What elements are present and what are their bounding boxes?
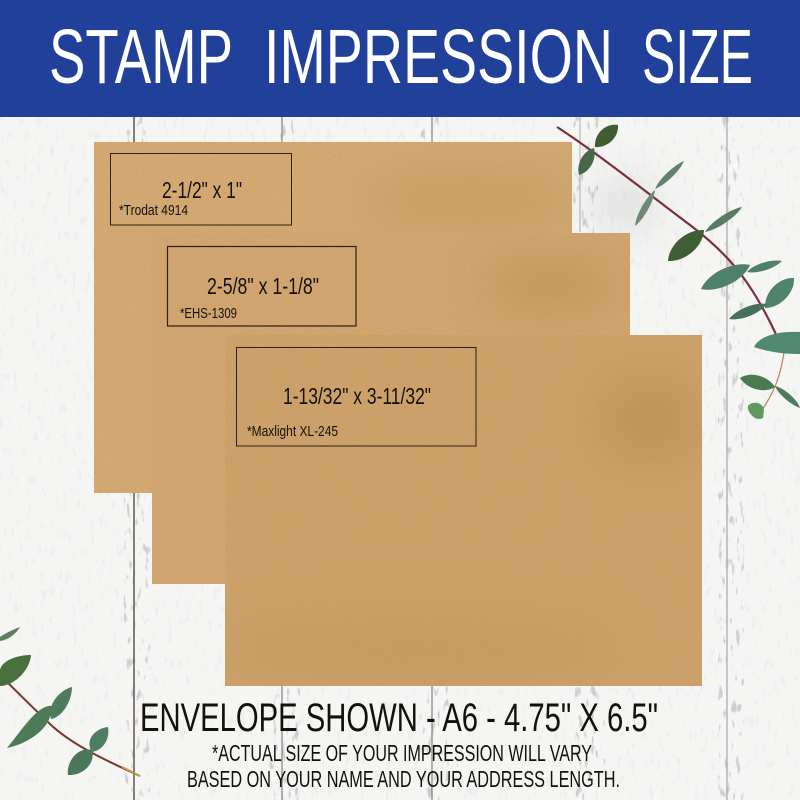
stamp box: Maxlight XL-245: [236, 348, 476, 446]
stamp box: Trodat 4914: [110, 154, 292, 225]
envelope 2: [152, 233, 630, 584]
envelope 3: [220, 335, 702, 686]
footnote: *ACTUAL SIZE OF YOUR IMPRESSION WILL VARY: [212, 740, 592, 766]
envelope 1: [94, 142, 580, 493]
footnote: BASED ON YOUR NAME AND YOUR ADDRESS LENGTH.: [187, 766, 620, 792]
stamp box: EHS-1309: [168, 246, 356, 326]
stamp box: EHS-1309: *EHS-1309: [180, 305, 237, 322]
stamp box: EHS-1309: 2-5/8" x 1-1/8": [207, 273, 319, 299]
title banner: STAMP: [49, 14, 233, 100]
title banner: [0, 0, 800, 117]
stamp box: Trodat 4914: 2-1/2" x 1": [162, 177, 242, 203]
title banner: IMPRESSION: [264, 14, 613, 100]
footnote: [187, 740, 620, 792]
eucalyptus branch: bottom left: [0, 627, 140, 776]
eucalyptus branch: top right: [557, 125, 800, 419]
stamp box: Maxlight XL-245: *Maxlight XL-245: [247, 423, 338, 440]
stamp box: Trodat 4914: *Trodat 4914: [119, 202, 188, 219]
stamp box: Maxlight XL-245: 1-13/32" x 3-11/32": [283, 383, 431, 409]
